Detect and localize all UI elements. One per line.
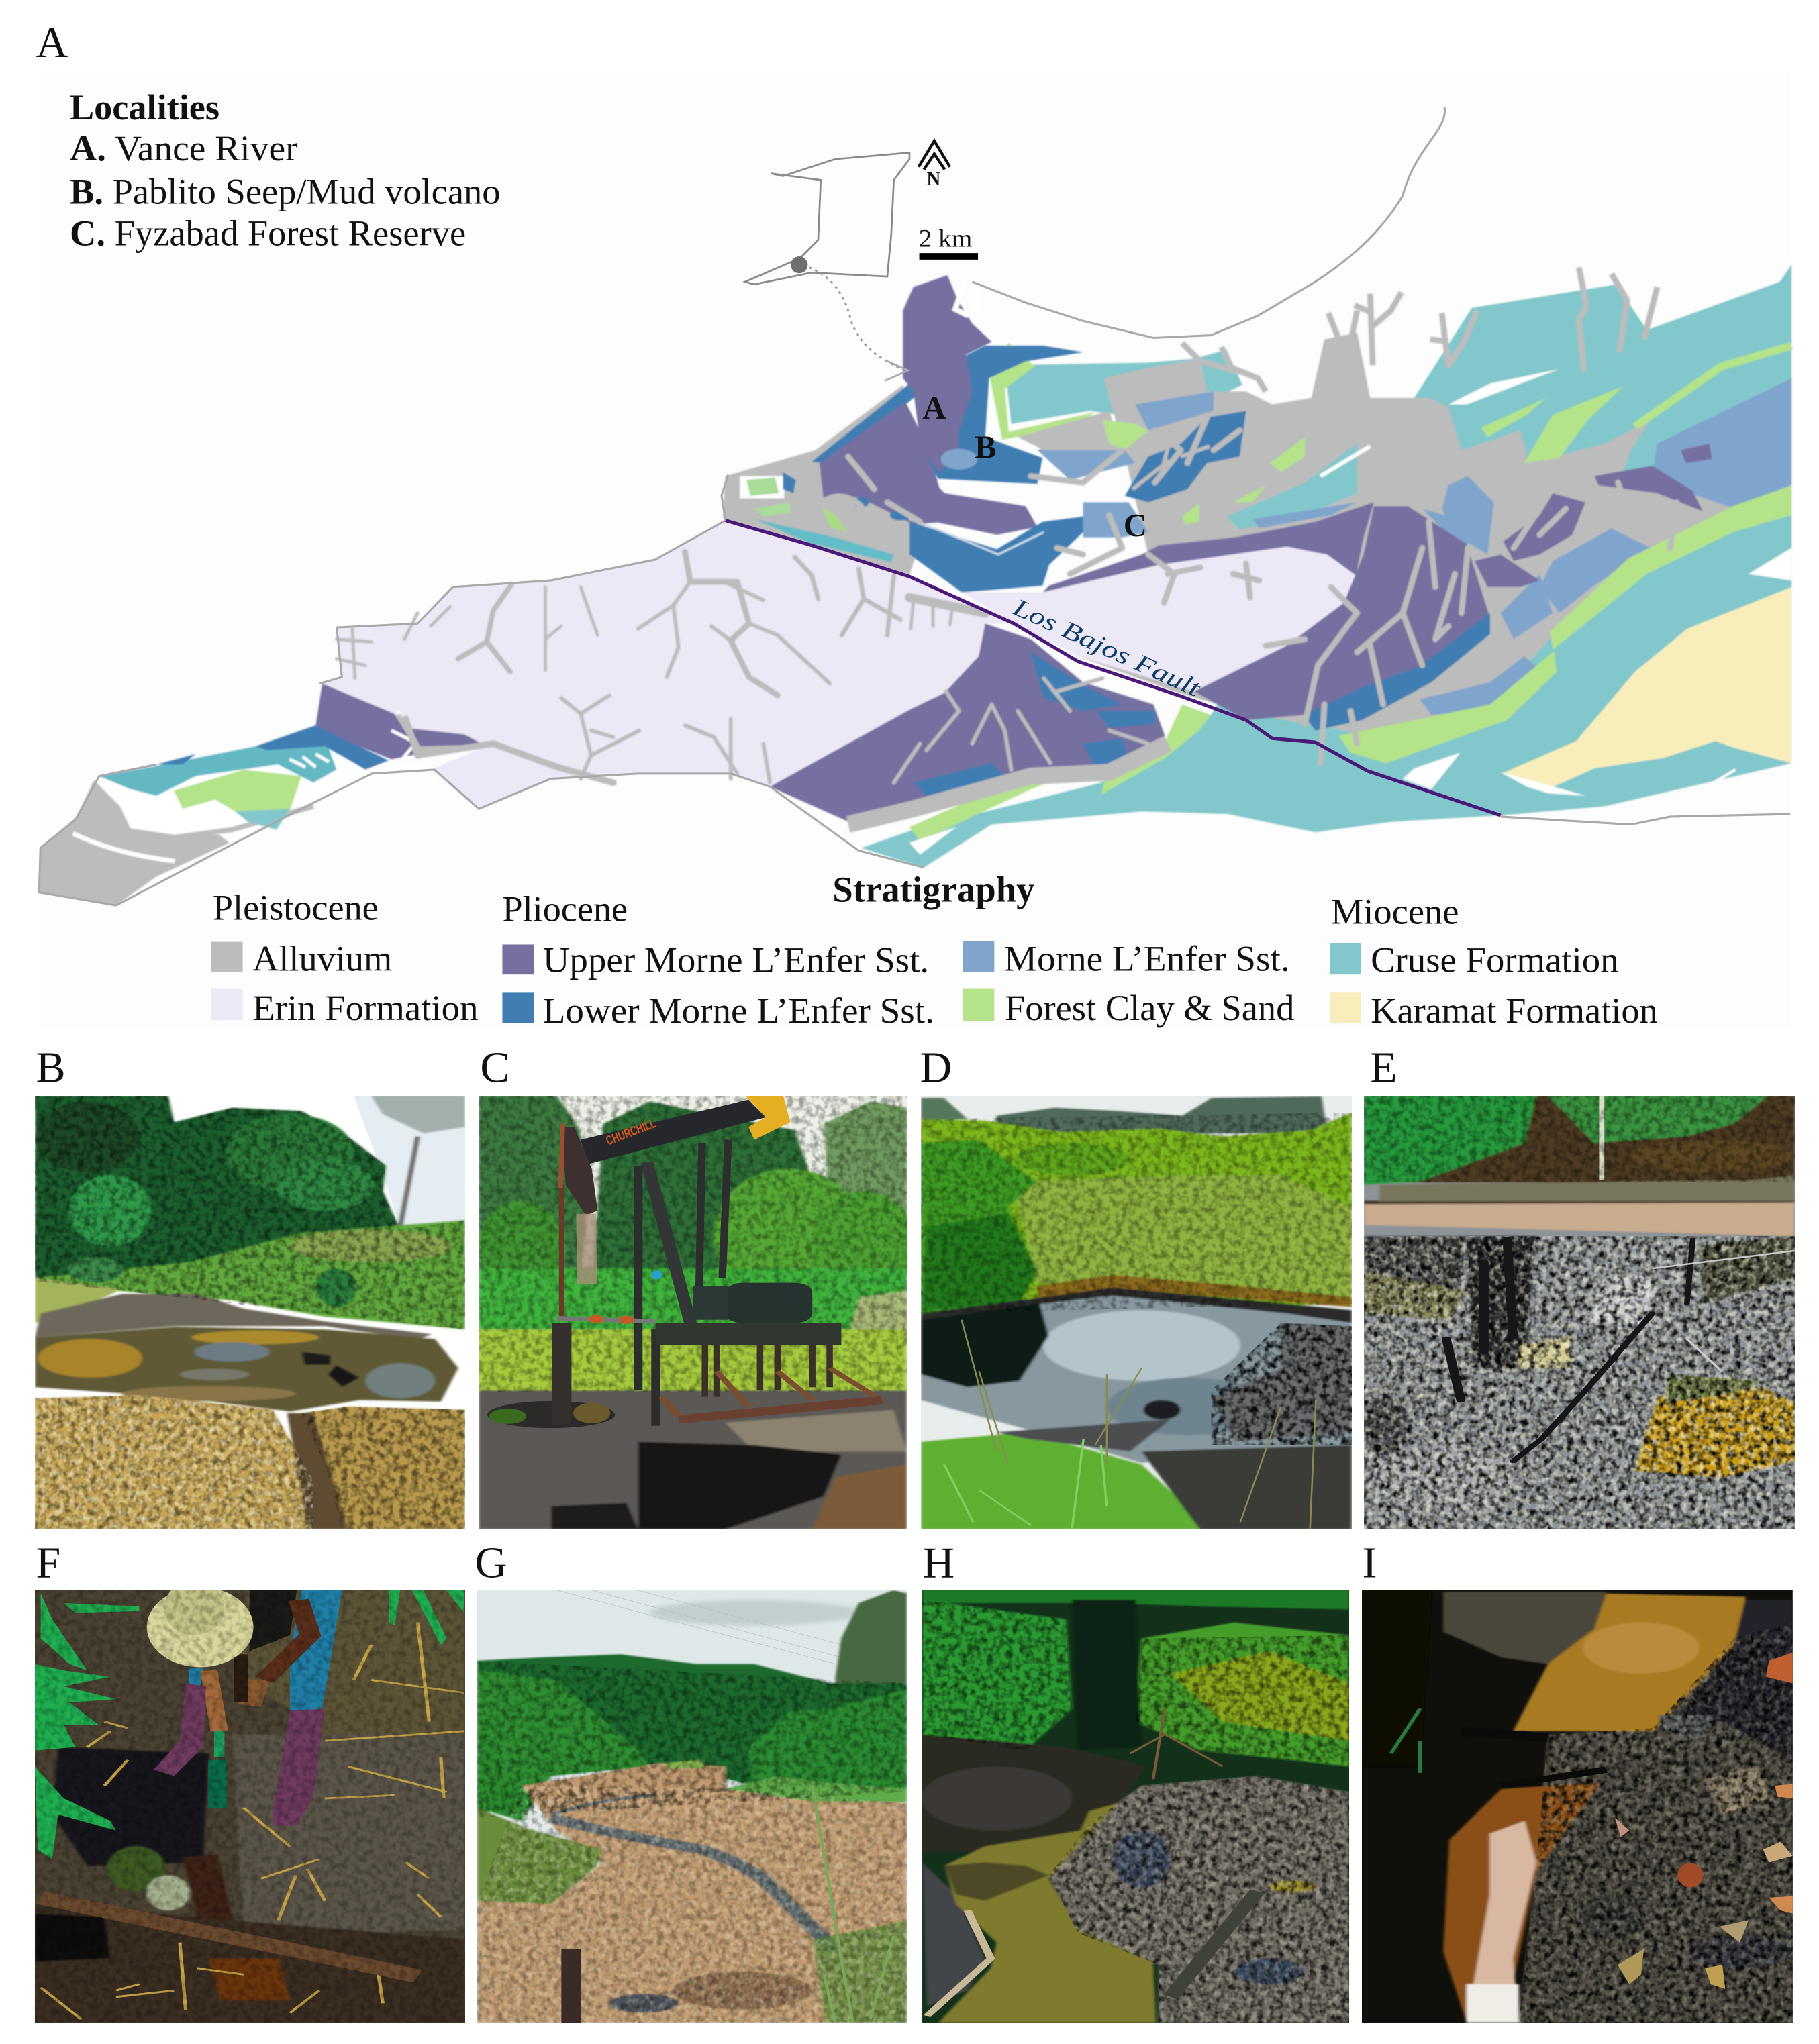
photo H: olive stream and gravel [922, 1590, 1349, 2023]
lower Morne fork [1125, 411, 1246, 502]
Pliocene group [502, 888, 1295, 1031]
locality markers on map [922, 390, 1147, 544]
Pleistocene group: Pleistocene [213, 888, 379, 928]
upper Morne arc [1042, 502, 1374, 593]
localities legend: A. Vance River [70, 128, 298, 168]
panel labels, row two: G [475, 1538, 507, 1587]
Erin Formation lens [962, 547, 1356, 691]
lower Morne main [921, 346, 1083, 484]
locality markers on map: A [922, 390, 946, 426]
localities legend: Localities [70, 87, 219, 127]
upper Morne east islands [1475, 444, 1712, 587]
Pliocene group: Lower Morne L’Enfer Sst. [543, 990, 934, 1031]
map background [39, 72, 1791, 1031]
upper Morne south of fault [770, 623, 1165, 825]
panel labels, row two: I [1363, 1538, 1377, 1587]
NW small features [740, 472, 911, 562]
alluvium centre [1078, 333, 1791, 737]
SW forest clay [174, 770, 301, 815]
SW teal strip [99, 738, 337, 796]
teal base east [861, 265, 1791, 868]
Miocene group [1330, 891, 1658, 1031]
photo E: burned ground with pipes [1364, 1096, 1795, 1529]
panel labels, row one: E [1370, 1043, 1397, 1092]
alluvium dendrites over Erin [337, 552, 985, 782]
photo G: dried stream bed among forest [477, 1590, 907, 2023]
NW alluvium wedge [723, 385, 926, 575]
Pliocene group: Pliocene [502, 888, 628, 929]
forest clay long east band [1550, 485, 1791, 650]
teal strip next to green [1018, 411, 1122, 450]
lower Morne south of fault [914, 652, 1154, 803]
upper Morne top peninsula [903, 275, 991, 472]
panel label A: A [36, 18, 68, 67]
locality markers on map: C [1124, 507, 1147, 544]
SW upper Morne [315, 684, 487, 759]
north arrow: N [926, 168, 940, 190]
white patches near Karamat [1501, 772, 1585, 796]
teal eastern lower block [1370, 502, 1791, 815]
panel labels, row two [36, 1538, 1377, 1587]
SW lower Morne [256, 725, 389, 770]
Pliocene group: Morne L’Enfer Sst. [1004, 938, 1290, 978]
upper Morne lower lobe [910, 458, 1037, 535]
panel labels, row one: B [36, 1043, 66, 1092]
alluvium coast band south [848, 744, 1168, 825]
green near Vance River [988, 343, 1095, 440]
light blue oval near B [941, 449, 977, 470]
panel labels, row two: F [36, 1538, 60, 1587]
location marker [791, 256, 807, 273]
Miocene group: Karamat Formation [1371, 990, 1658, 1031]
panel labels, row one: C [480, 1043, 509, 1092]
teal central patch [1226, 444, 1357, 529]
Miocene group: Cruse Formation [1371, 939, 1619, 980]
Morne light blue patches [1037, 378, 1791, 715]
fault line: Los Bajos Fault [726, 521, 1501, 815]
photo D: oil-stained pond and grass [921, 1096, 1352, 1529]
Pliocene group: Upper Morne L’Enfer Sst. [543, 939, 929, 980]
localities legend: C. Fyzabad Forest Reserve [70, 213, 466, 253]
scale bar [919, 224, 978, 260]
photo F: researcher sampling in wet litter [35, 1590, 465, 2023]
Pleistocene group [211, 888, 478, 1028]
photo C: oil pump jack [479, 1096, 907, 1529]
photo I: orange seep stream with dark rocks [1361, 1590, 1793, 2023]
fault label: Los Bajos Fault [1008, 593, 1205, 702]
arrow head [885, 360, 908, 381]
photo B: seep pool with straw [35, 1096, 465, 1529]
north arrow [919, 141, 950, 190]
Pleistocene group: Alluvium [252, 938, 392, 978]
map: geology polygons [39, 265, 1791, 905]
alluvium dendrites over Morne [809, 417, 1677, 782]
locality markers on map: B [975, 429, 997, 465]
stratigraphy legend [211, 869, 1658, 1031]
panel labels, row one: D [920, 1043, 952, 1092]
forest clay patches [910, 386, 1623, 841]
upper Morne east [1194, 506, 1490, 720]
Karamat Formation [1502, 587, 1791, 789]
scale bar: 2 km [919, 224, 973, 252]
SW peninsula land [39, 746, 434, 905]
white lens [1448, 369, 1559, 405]
Pleistocene group: Erin Formation [252, 988, 478, 1028]
Pliocene group: Forest Clay & Sand [1005, 988, 1295, 1028]
localities legend [70, 87, 501, 253]
alluvium north-west bars [1533, 391, 1618, 437]
legend title: Stratigraphy [832, 869, 1035, 909]
lower Morne south [910, 517, 1083, 593]
Miocene group: Miocene [1331, 891, 1459, 931]
localities legend: B. Pablito Seep/Mud volcano [70, 171, 501, 211]
coast outlines [39, 107, 1790, 905]
inset map of Trinidad [745, 152, 910, 381]
Erin Formation west block [319, 521, 1014, 809]
lower Morne east strip [1304, 613, 1490, 731]
forest clay north-east band [1635, 346, 1791, 427]
NW blue strip [812, 384, 921, 464]
upper Morne west [820, 402, 1031, 524]
pump brand text: CHURCHILL [604, 1116, 658, 1149]
alluvium branches north [1182, 268, 1657, 391]
panel labels, row one [36, 1043, 1397, 1092]
teal north cluster [1005, 350, 1242, 424]
panel labels, row two: H [922, 1538, 954, 1587]
panel: geological map [39, 72, 1791, 1031]
dark fork dendrites [1132, 433, 1210, 489]
SW alluvium [39, 780, 230, 905]
dotted leader [809, 268, 903, 369]
